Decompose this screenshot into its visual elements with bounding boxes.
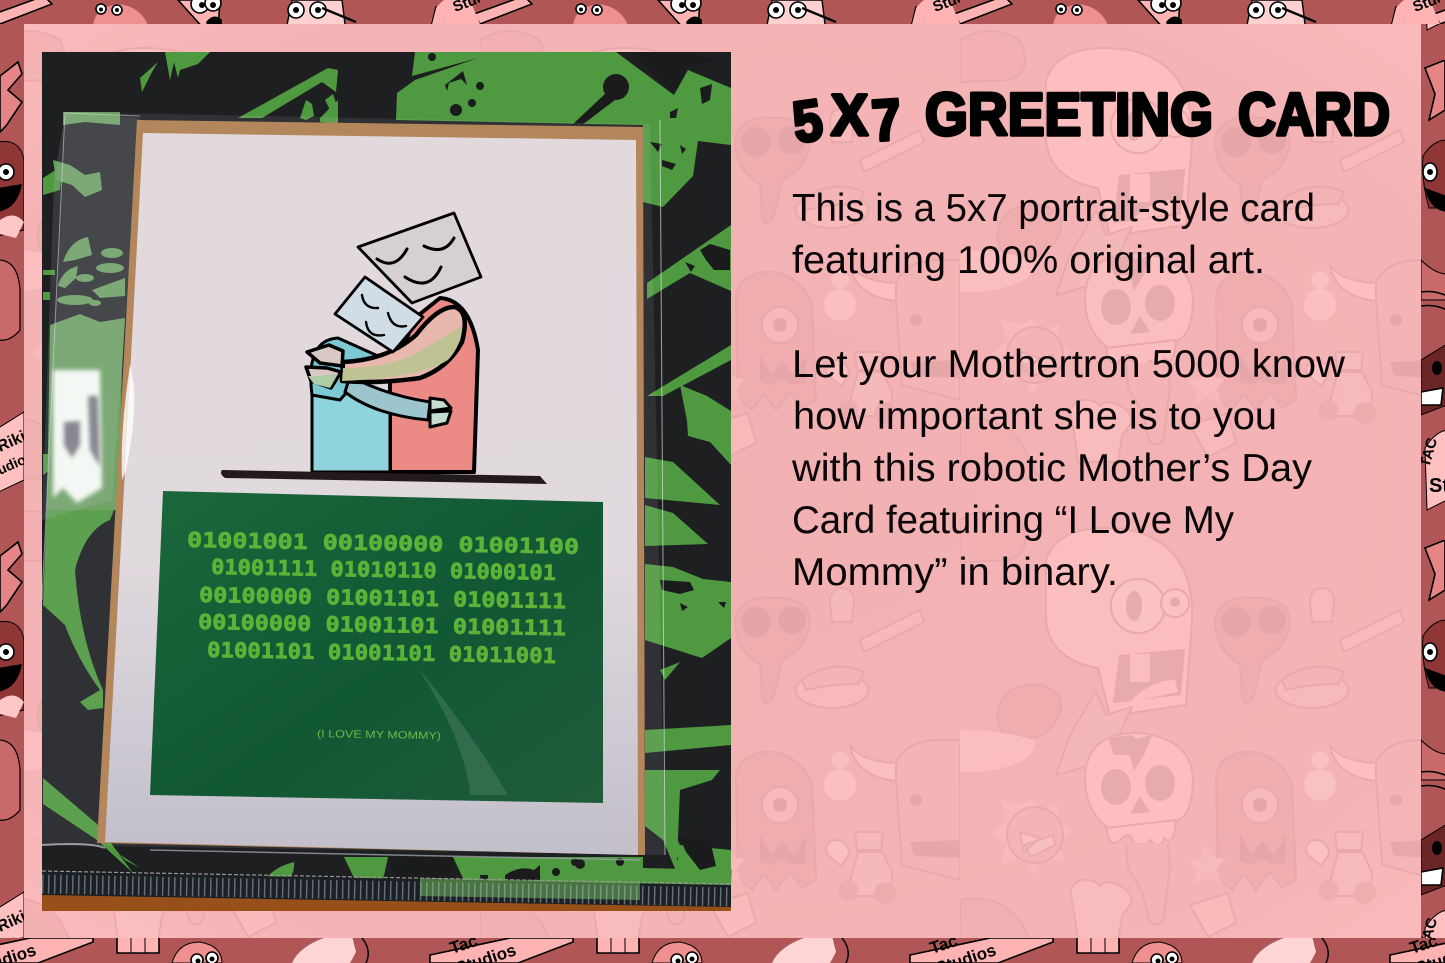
binary translation caption: (I LOVE MY MOMMY) xyxy=(317,728,441,742)
title: GREETING xyxy=(925,81,1213,148)
big head xyxy=(358,213,481,303)
white card xyxy=(105,133,638,855)
title: X xyxy=(831,83,868,148)
mat background xyxy=(42,52,731,911)
title: CARD xyxy=(1238,81,1390,148)
green blotches seen through the sleeve xyxy=(47,112,125,510)
green binary panel: 01001101 01001101 01011001 xyxy=(207,638,556,668)
child robot body xyxy=(312,392,390,472)
description paragraph 1: featuring 100% original art. xyxy=(792,239,1265,282)
small head xyxy=(335,277,423,352)
photo: greeting card on green and black mat xyxy=(42,52,732,911)
shelf line xyxy=(221,470,547,484)
parent arm xyxy=(342,307,465,382)
green binary panel: 00100000 01001101 01001111 xyxy=(199,583,566,613)
card glare xyxy=(122,365,134,480)
title: 5 xyxy=(789,87,827,156)
black splatter on green xyxy=(388,52,730,895)
description paragraph 2: how important she is to you xyxy=(793,395,1277,438)
description paragraph 2 xyxy=(791,343,1346,594)
green binary panel: 01001111 01010110 01000101 xyxy=(211,555,556,585)
green binary panel xyxy=(150,491,603,803)
mat stitched edge xyxy=(42,871,731,905)
plastic sleeve xyxy=(42,112,665,860)
hug illustration xyxy=(306,213,481,472)
title xyxy=(789,81,1390,156)
description paragraph 2: Let your Mothertron 5000 know xyxy=(792,343,1346,386)
wooden table edge xyxy=(42,895,731,911)
description paragraph 2: Card featuiring “I Love My xyxy=(792,499,1234,542)
description paragraph 1: This is a 5x7 portrait-style card xyxy=(792,187,1315,230)
green binary panel: 00100000 01001101 01001111 xyxy=(198,610,566,640)
binary text: 01001001 00100000 01001100 xyxy=(187,528,579,559)
parent robot body xyxy=(390,298,478,472)
description paragraph 2: Mommy” in binary. xyxy=(792,551,1118,594)
child arm xyxy=(345,376,430,420)
description paragraph 2: with this robotic Mother’s Day xyxy=(791,447,1313,490)
title: 7 xyxy=(870,87,903,154)
green splatter on mat xyxy=(43,52,732,897)
green arc and lower-left mat patches xyxy=(43,500,118,710)
parent hand xyxy=(306,345,343,388)
description paragraph 1 xyxy=(792,187,1315,282)
kraft envelope xyxy=(97,120,645,855)
